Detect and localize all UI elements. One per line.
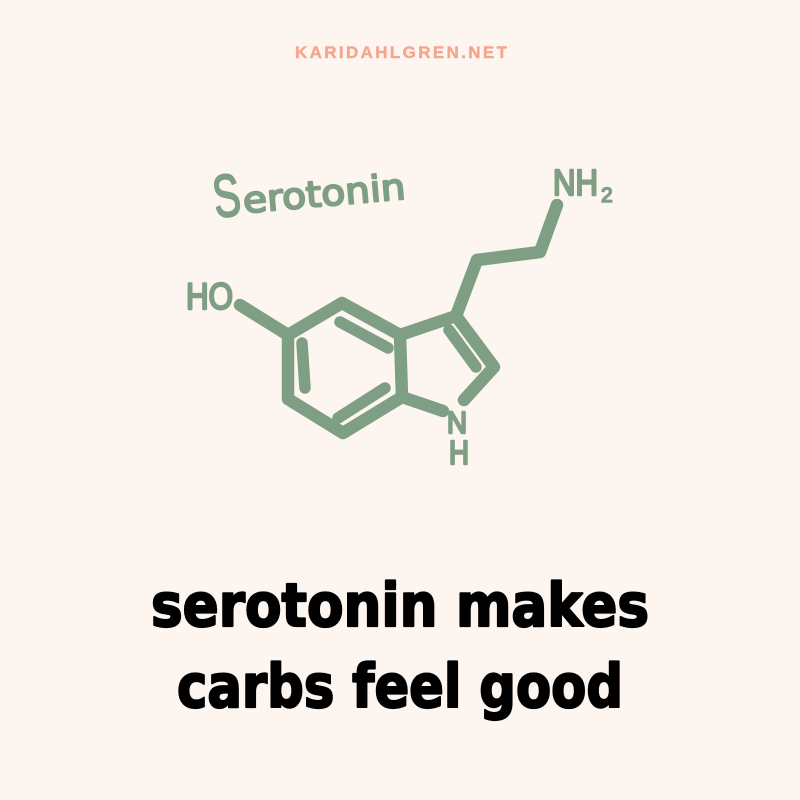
atom label: NH of indole ring: N — [447, 405, 467, 440]
atom label: HO: HO — [186, 276, 233, 317]
handwritten label: Serotonin: S — [208, 161, 245, 231]
headline — [151, 571, 649, 722]
handwritten label: Serotonin: erotonin — [241, 167, 407, 222]
ethylamine side chain — [456, 205, 557, 316]
pyrrole ring bonds — [400, 316, 494, 411]
hydroxyl bond — [240, 305, 288, 335]
inner double bonds — [302, 322, 476, 418]
handwritten label: Serotonin — [208, 161, 407, 231]
website label: KARIDAHLGREN.NET — [295, 43, 508, 62]
headline: carbs feel good — [177, 652, 623, 722]
atom label: NH of indole ring: H — [449, 434, 469, 471]
headline: serotonin makes — [151, 571, 649, 641]
atom label: NH of indole ring — [447, 405, 469, 471]
atom label: NH2: NH — [553, 162, 598, 203]
atom label: NH2: 2 — [601, 184, 613, 207]
benzene ring — [288, 303, 402, 433]
molecule diagram: serotonin structure — [240, 205, 557, 433]
